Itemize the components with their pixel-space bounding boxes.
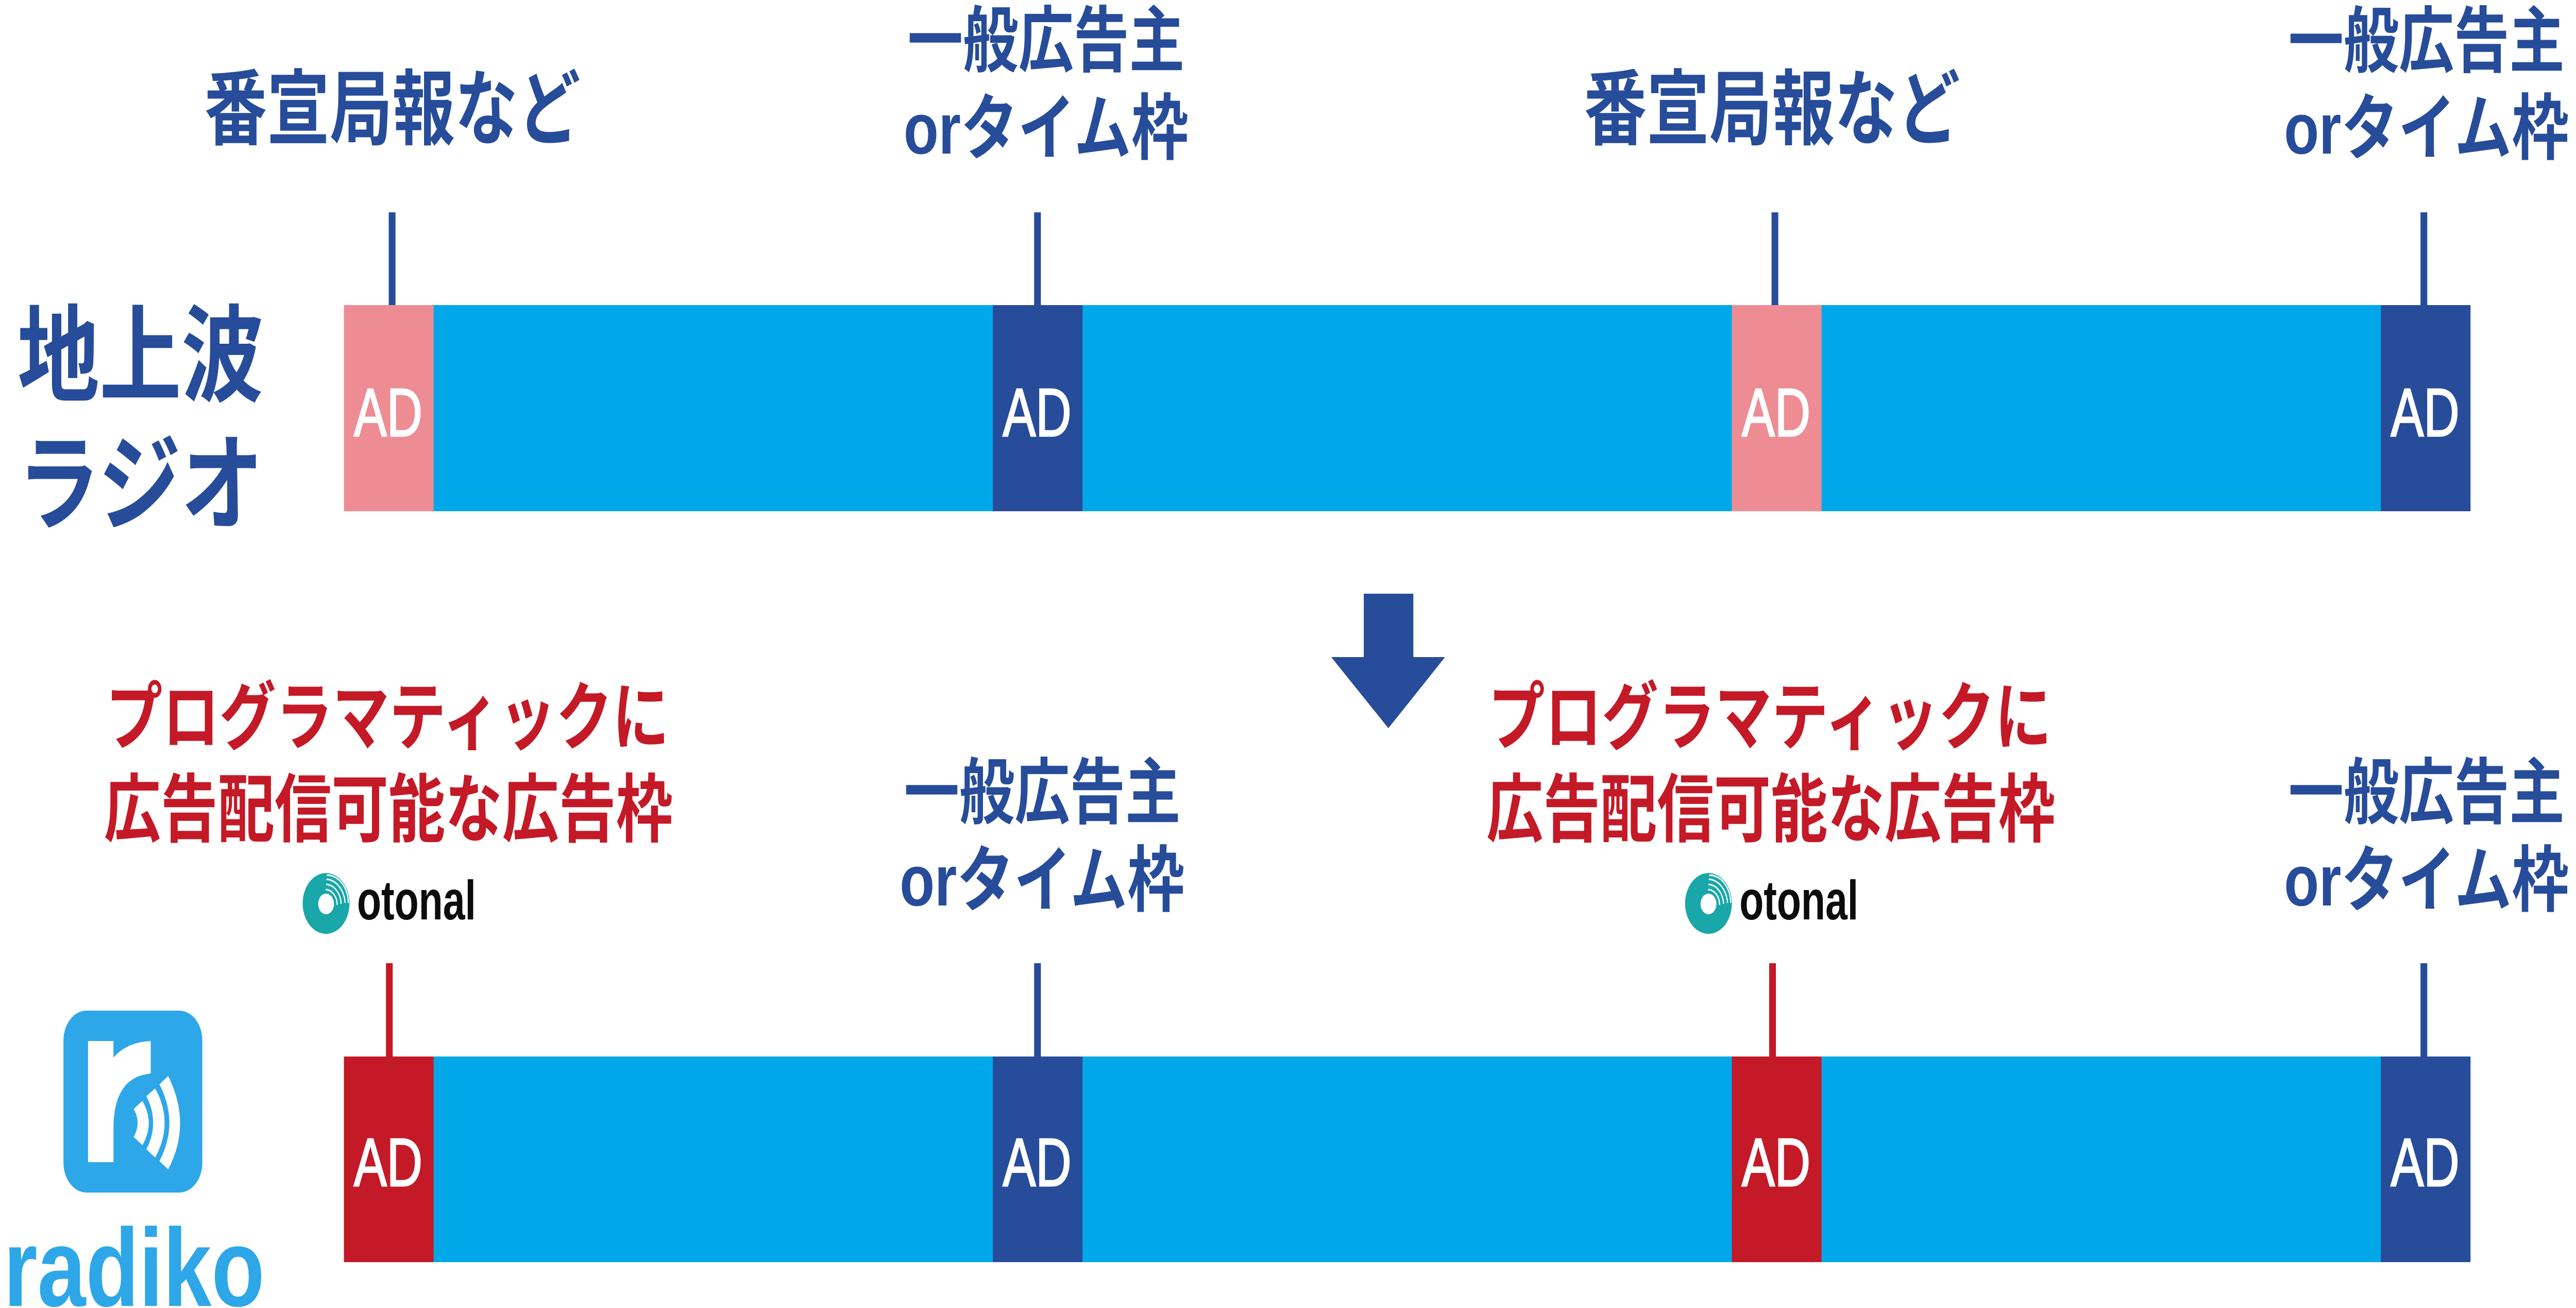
heading: programmatic 1: プログラマティックに xyxy=(106,677,669,760)
heading: 番宣局報など 2: 番宣局報など xyxy=(1584,64,1960,156)
ad slot: navy 2 xyxy=(2381,305,2470,511)
heading: programmatic 1 xyxy=(104,677,673,852)
connector line 8 xyxy=(2420,963,2427,1057)
heading: 一般広告主 or タイム枠 1: orタイム枠 xyxy=(904,89,1189,169)
logo: radiko icon xyxy=(63,1011,202,1193)
connector line 7 xyxy=(1769,963,1776,1057)
ad slot: pink 2: AD xyxy=(1742,374,1810,450)
heading: 一般広告主 or タイム枠 4 xyxy=(2284,753,2569,921)
timeline bar: radiko xyxy=(344,1057,2470,1262)
connector line 6 xyxy=(1034,963,1041,1057)
ad slot: pink 2 xyxy=(1732,305,1822,511)
ad slot: red 1 xyxy=(344,1057,434,1262)
heading: 一般広告主 or タイム枠 1 xyxy=(904,1,1189,169)
ad slot: red 2: AD xyxy=(1742,1124,1810,1200)
ad slot: red 2 xyxy=(1732,1057,1822,1262)
ad slot: navy 1: AD xyxy=(1003,374,1072,450)
connector line 5 xyxy=(386,963,393,1057)
logo: otonal 2: otonal xyxy=(1739,870,1858,932)
heading: programmatic 2 xyxy=(1486,677,2055,852)
row label: 地上波ラジオ: 地上波 xyxy=(18,297,263,416)
logo: otonal 1 xyxy=(302,870,476,934)
row label: 地上波ラジオ: ラジオ xyxy=(18,426,263,544)
heading: programmatic 1: 広告配信可能な広告枠 xyxy=(104,769,673,852)
row label: 地上波ラジオ xyxy=(18,297,263,544)
heading: 一般広告主 or タイム枠 2 xyxy=(2284,2,2569,169)
ad slot: navy 1 xyxy=(993,305,1082,511)
logo: otonal 1: otonal xyxy=(357,870,476,932)
connector line 3 xyxy=(1772,212,1778,305)
heading: 一般広告主 or タイム枠 3: orタイム枠 xyxy=(900,841,1184,921)
heading: 一般広告主 or タイム枠 1: 一般広告主 xyxy=(908,1,1184,81)
heading: 一般広告主 or タイム枠 2: 一般広告主 xyxy=(2289,2,2565,82)
heading: programmatic 2: プログラマティックに xyxy=(1488,677,2052,760)
ad slot: pink 1: AD xyxy=(354,374,422,450)
timeline bar: terrestrial radio xyxy=(344,305,2470,511)
heading: 一般広告主 or タイム枠 3: 一般広告主 xyxy=(904,753,1180,833)
connector line 4 xyxy=(2420,212,2427,305)
ad slot: navy 3 xyxy=(993,1057,1082,1262)
ad slot: pink 1 xyxy=(344,305,434,511)
ad slot: red 1: AD xyxy=(354,1124,422,1200)
logo: otonal 2 xyxy=(1685,870,1858,934)
heading: 一般広告主 or タイム枠 3 xyxy=(900,753,1184,921)
connector line 1 xyxy=(389,212,396,305)
heading: 一般広告主 or タイム枠 2: orタイム枠 xyxy=(2284,89,2569,169)
heading: 番宣局報など 1: 番宣局報など xyxy=(205,64,580,156)
heading: 一般広告主 or タイム枠 4: 一般広告主 xyxy=(2289,753,2565,833)
arrow: down xyxy=(1331,594,1445,728)
heading: programmatic 2: 広告配信可能な広告枠 xyxy=(1486,769,2055,852)
ad slot: navy 3: AD xyxy=(1003,1124,1072,1200)
ad slot: navy 4: AD xyxy=(2391,1124,2460,1200)
heading: 一般広告主 or タイム枠 4: orタイム枠 xyxy=(2284,841,2569,921)
connector line 2 xyxy=(1034,212,1041,305)
ad slot: navy 2: AD xyxy=(2391,374,2460,450)
ad slot: navy 4 xyxy=(2381,1057,2470,1262)
